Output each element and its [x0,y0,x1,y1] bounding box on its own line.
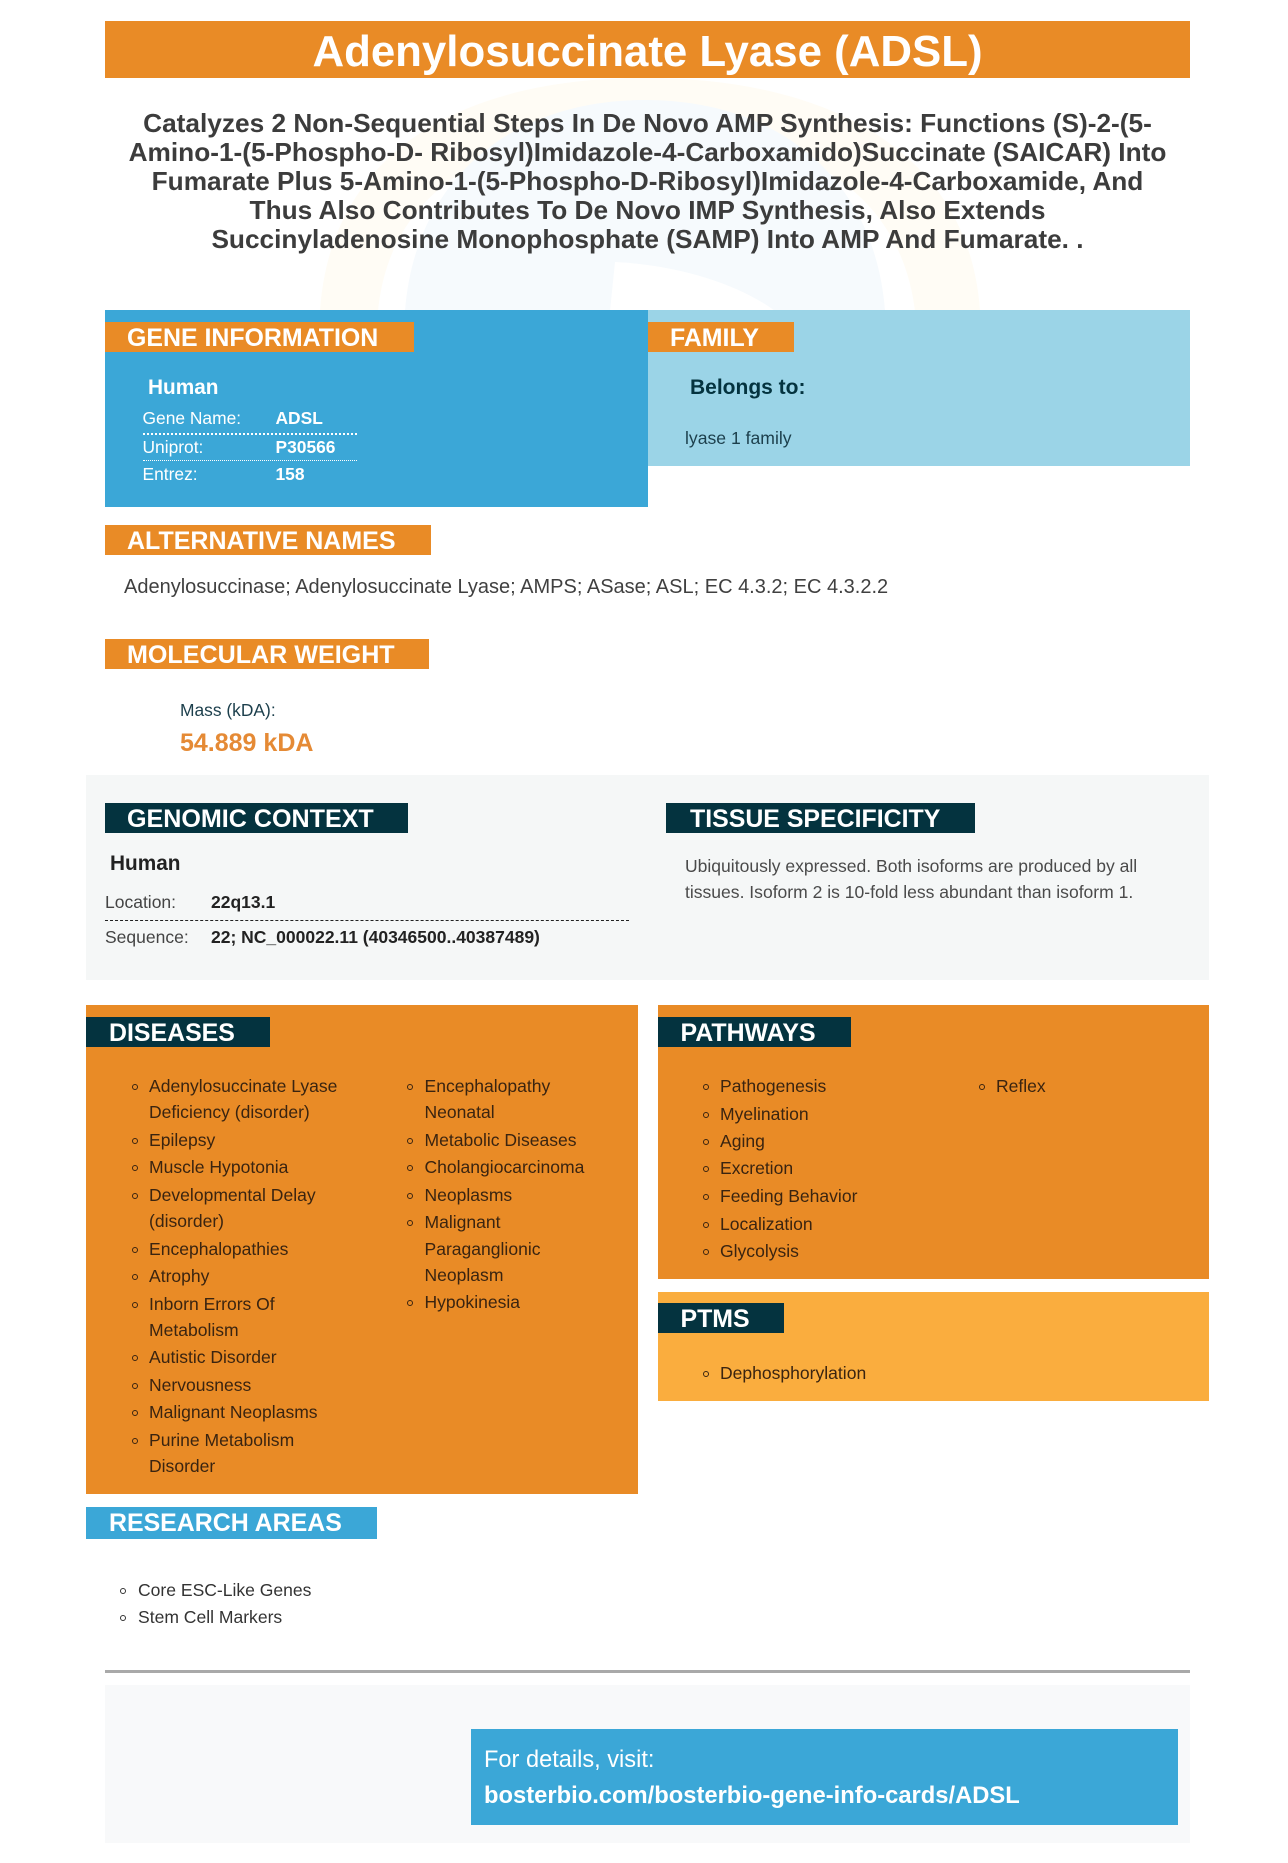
pathway list column 2: Reflex [996,1076,1046,1096]
heading: alternative names: ALTERNATIVE NAMES [127,527,396,555]
title [105,21,1190,78]
disease list column 1: Muscle Hypotonia [149,1157,288,1177]
disease list column 1: Atrophy [149,1266,209,1286]
panel: family [648,310,1190,466]
pathway list column 1: Feeding Behavior [720,1186,857,1206]
heading: research areas: RESEARCH AREAS [109,1509,342,1537]
entrez row: Entrez: [142,464,198,484]
entrez row [142,464,305,484]
disease list column 1: Deficiency (disorder) [149,1102,310,1122]
pathway list column 1: Excretion [720,1158,793,1178]
divider [105,1670,1190,1673]
research areas list [120,1580,311,1627]
heading: pathways [658,1017,851,1047]
disease list column 2: Cholangiocarcinoma [424,1157,584,1177]
research areas list: Stem Cell Markers [138,1607,282,1627]
location row: 22q13.1 [211,892,275,912]
family value: lyase 1 family [685,428,792,448]
disease list column 1: Malignant Neoplasms [149,1402,318,1422]
disease list column 2: Hypokinesia [424,1292,520,1312]
subtitle description: Succinyladenosine Monophosphate (SAMP) Into AMP And Fumarate. . [211,224,1084,254]
disease list column 2: Neoplasms [424,1185,512,1205]
heading: diseases: DISEASES [109,1019,235,1047]
pathway list column 1: Pathogenesis [720,1076,826,1096]
research areas list: Core ESC-Like Genes [138,1580,311,1600]
tissue specificity text [685,856,1137,902]
gene name row [142,404,356,435]
mass value: 54.889 kDA [180,729,313,757]
species label: Human [110,852,180,875]
entrez row: 158 [276,464,305,484]
tissue specificity text: Ubiquitously expressed. Both isoforms are produced by all [685,856,1137,876]
disease list column 2: Encephalopathy [424,1076,550,1096]
species label: Human [148,376,218,399]
disease list column 1: Nervousness [149,1375,251,1395]
panel: genomic context and tissue specificity [86,775,1209,980]
panel: diseases [86,1005,638,1494]
pathway list column 1: Myelination [720,1104,809,1124]
heading: molecular weight: MOLECULAR WEIGHT [127,641,395,669]
gene name row: Gene Name: [142,408,241,428]
disease list column 1: Adenylosuccinate Lyase [149,1076,337,1096]
heading: family: FAMILY [670,324,759,352]
callout url: bosterbio.com/bosterbio-gene-info-cards/ADSL [484,1782,1020,1809]
panel: ptms [658,1292,1209,1401]
tissue specificity text: tissues. Isoform 2 is 10-fold less abundant than isoform 1. [685,882,1133,902]
watermark logo [320,78,980,310]
panel: pathways [658,1005,1209,1279]
panel: footer [105,1685,1190,1843]
heading: diseases [86,1017,270,1047]
belongs to label: Belongs to: [690,376,806,399]
disease list column 2 [407,1076,584,1312]
uniprot row: P30566 [276,437,335,457]
pathway list column 1: Aging [720,1131,765,1151]
pathway list column 1 [703,1076,858,1261]
heading: gene information: GENE INFORMATION [127,324,378,352]
heading: family [648,322,794,352]
location row [105,887,629,921]
alternative names text: Adenylosuccinase; Adenylosuccinate Lyase; AMPS; ASase; ASL; EC 4.3.2; EC 4.3.2.2 [124,576,888,598]
disease list column 2: Metabolic Diseases [424,1130,577,1150]
sequence row: Sequence: [105,927,189,947]
disease list column 1: Autistic Disorder [149,1347,277,1367]
gene name row: ADSL [276,408,323,428]
sequence row: 22; NC_000022.11 (40346500..40387489) [211,927,540,947]
subtitle description [129,108,1166,254]
disease list column 1 [132,1076,337,1476]
subtitle description: Fumarate Plus 5-Amino-1-(5-Phospho-D-Ribosyl)Imidazole-4-Carboxamide, And [152,166,1143,196]
pathway list column 1: Localization [720,1214,813,1234]
mass label: Mass (kDA): [180,700,276,720]
pathway list column 1: Glycolysis [720,1241,799,1261]
subtitle description: Thus Also Contributes To De Novo IMP Synthesis, Also Extends [250,195,1045,225]
heading: ptms [658,1303,784,1333]
location row: Location: [105,892,176,912]
heading: pathways: PATHWAYS [680,1019,816,1047]
disease list column 1: Metabolism [149,1320,239,1340]
disease list column 2: Neonatal [424,1102,495,1122]
heading: tissue specificity: TISSUE SPECIFICITY [690,805,940,833]
disease list column 1: Disorder [149,1456,215,1476]
disease list column 2: Neoplasm [424,1265,503,1285]
disease list column 1: Purine Metabolism [149,1430,294,1450]
heading: genomic context: GENOMIC CONTEXT [127,805,374,833]
heading: ptms: PTMS [680,1305,750,1333]
panel: gene information [105,310,648,507]
disease list column 1: Encephalopathies [149,1239,288,1259]
subtitle description: Amino-1-(5-Phospho-D- Ribosyl)Imidazole-4-Carboxamido)Succinate (SAICAR) Into [129,137,1166,167]
disease list column 1: Inborn Errors Of [149,1294,275,1314]
disease list column 1: (disorder) [149,1211,224,1231]
uniprot row: Uniprot: [142,437,203,457]
disease list column 2: Malignant [424,1212,501,1232]
disease list column 1: Epilepsy [149,1130,215,1150]
ptm list item: Dephosphorylation [720,1363,866,1383]
callout label: For details, visit: [484,1747,654,1773]
disease list column 2: Paraganglionic [424,1239,540,1259]
disease list column 1: Developmental Delay [149,1185,316,1205]
callout: details link [471,1729,1178,1825]
title: Adenylosuccinate Lyase (ADSL) [312,27,983,76]
uniprot row [142,434,356,461]
subtitle description: Catalyzes 2 Non-Sequential Steps In De Novo AMP Synthesis: Functions (S)-2-(5- [143,108,1152,138]
